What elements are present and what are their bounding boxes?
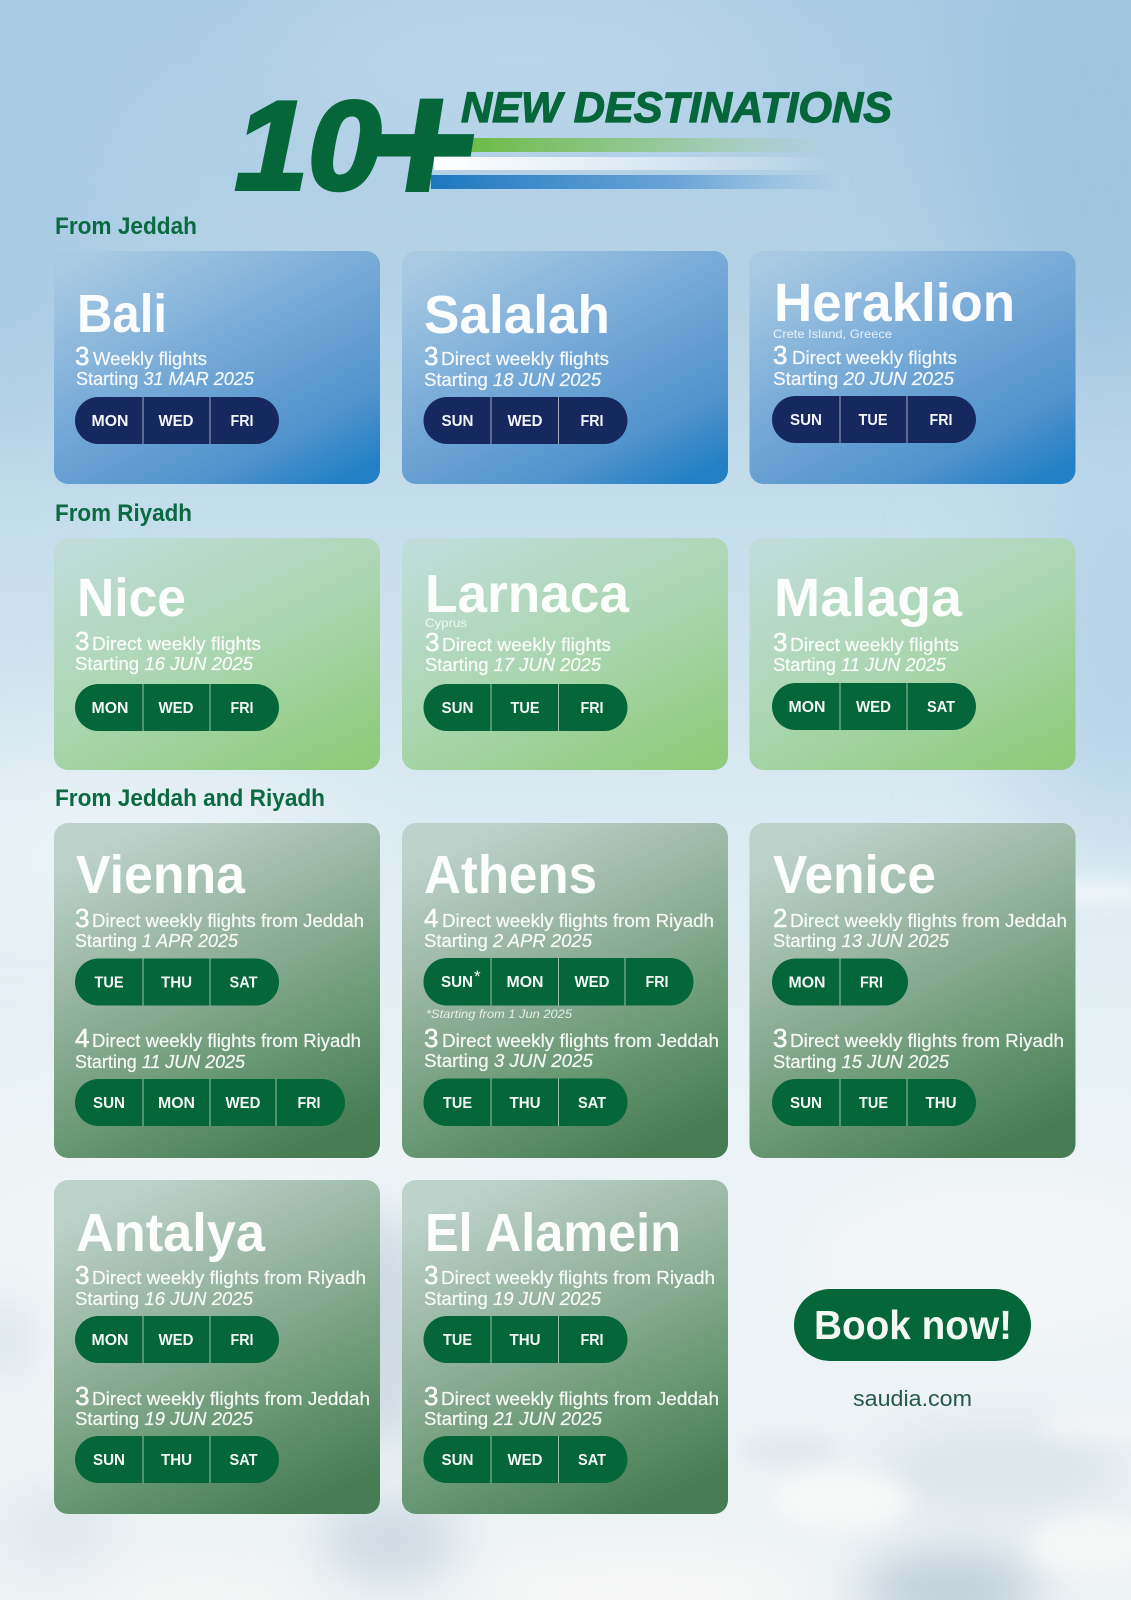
flight info from Riyadh: Direct weekly flights from Riyadh [92, 1030, 361, 1051]
flight info from Jeddah: Direct weekly flights from Jeddah [442, 1030, 719, 1051]
flight info: Direct weekly flights [792, 347, 957, 368]
flight days pill [772, 683, 976, 730]
panel: Nice [54, 538, 380, 770]
flight days pill: SUN [790, 1095, 822, 1112]
panel: Antalya [54, 1180, 380, 1514]
section heading: From Jeddah and Riyadh: From Jeddah and Riyadh [55, 785, 325, 812]
flight info from Riyadh: Direct weekly flights from Riyadh [442, 910, 714, 931]
panel: Malaga [750, 538, 1076, 770]
destination name: Vienna [76, 845, 246, 905]
flight days pill: FRI [298, 1095, 320, 1112]
flight days pill: FRI [580, 413, 604, 430]
flight info: Starting 17 JUN 2025 [425, 654, 602, 675]
flight days pill [75, 684, 279, 731]
flight days pill: TUE [94, 974, 124, 992]
flight info from Riyadh: Starting 19 JUN 2025 [424, 1288, 602, 1309]
flight info from Riyadh: 3 [75, 1260, 89, 1290]
panel: Larnaca [402, 538, 728, 770]
location: Crete Island, Greece [773, 327, 892, 341]
flight days pill: WED [508, 1452, 542, 1469]
panel: El Alamein [402, 1180, 728, 1514]
flight days pill: SAT [578, 1452, 606, 1469]
flight info from Jeddah: 3 [424, 1381, 438, 1411]
flight days pill: FRI [646, 974, 668, 991]
section heading: From Jeddah: From Jeddah [55, 213, 197, 240]
flight days pill: TUE [510, 700, 540, 717]
flight days pill: THU [510, 1332, 540, 1349]
flight info from Jeddah [75, 903, 364, 951]
location: Cyprus [425, 616, 467, 630]
flight info: Direct weekly flights [790, 634, 959, 655]
flight days pill: SUN [93, 1095, 125, 1112]
flight days pill: FRI [930, 412, 952, 429]
flight days pill [75, 1316, 279, 1363]
flight info [773, 627, 959, 675]
button: Book now [794, 1289, 1031, 1361]
flight info [773, 340, 957, 389]
flight days pill: WED [226, 1095, 260, 1112]
flight info from Riyadh: 4 [424, 903, 438, 933]
destination name: El Alamein [425, 1203, 681, 1263]
flight info: 3 [424, 341, 438, 371]
flight days pill [772, 1079, 976, 1126]
flight info from Riyadh: Starting 15 JUN 2025 [773, 1051, 950, 1072]
panel: Venice [750, 823, 1076, 1158]
flight info from Riyadh: Starting 11 JUN 2025 [75, 1051, 246, 1072]
flight days pill: SAT [230, 1452, 258, 1469]
flight info from Riyadh [773, 1023, 1064, 1072]
flight info from Riyadh: 3 [773, 1023, 787, 1053]
flight info: Starting 16 JUN 2025 [75, 653, 254, 674]
flight info from Jeddah: Direct weekly flights from Jeddah [92, 910, 364, 931]
flight days pill: SUN [442, 1452, 474, 1469]
flight days pill: FRI [230, 1332, 254, 1349]
flight info [425, 627, 611, 675]
flight info from Jeddah: Starting 19 JUN 2025 [75, 1408, 254, 1429]
flight days pill [75, 958, 279, 1006]
section heading: From Riyadh: From Riyadh [55, 500, 192, 527]
flight info from Riyadh [424, 1260, 715, 1309]
flight days pill: FRI [580, 1332, 604, 1349]
footnote: *Starting from 1 Jun 2025 [426, 1009, 573, 1021]
flight info: Starting 20 JUN 2025 [773, 368, 955, 389]
flight info from Riyadh: Starting 16 JUN 2025 [75, 1288, 254, 1309]
flight info from Riyadh: 4 [75, 1023, 89, 1053]
flight info from Riyadh: Starting 2 APR 2025 [424, 930, 593, 951]
flight days pill [772, 396, 976, 443]
destination name: Larnaca [425, 564, 630, 624]
flight info: 3 [75, 341, 89, 371]
flight days pill [424, 1078, 628, 1126]
flight info from Jeddah: 2 [773, 903, 787, 933]
speed stripes [431, 138, 841, 189]
title: 10+ new destinations [235, 44, 892, 242]
flight info from Jeddah: Starting 1 APR 2025 [75, 930, 239, 951]
panel: Vienna [54, 823, 380, 1158]
flight days pill: SAT [927, 699, 955, 716]
flight info: Weekly flights [93, 348, 207, 369]
flight info: 3 [425, 627, 439, 657]
flight days pill: MON [92, 413, 128, 430]
flight info from Riyadh: Direct weekly flights from Riyadh [790, 1030, 1064, 1051]
flight info from Jeddah [773, 903, 1067, 951]
flight days pill: MON [92, 700, 128, 717]
heading number: 10 [235, 75, 381, 216]
flight info: Direct weekly flights [92, 633, 261, 654]
destination name: Venice [773, 845, 936, 905]
flight days pill: SUN [442, 700, 474, 717]
flight info from Jeddah [424, 1023, 719, 1071]
flight info: Direct weekly flights [442, 634, 611, 655]
flight info: 3 [773, 627, 787, 657]
flight info from Riyadh: Direct weekly flights from Riyadh [92, 1267, 366, 1288]
flight info from Jeddah: Direct weekly flights from Jeddah [92, 1388, 370, 1409]
panel: Bali [54, 251, 380, 484]
flight days pill: WED [158, 413, 194, 430]
flight info from Riyadh: Direct weekly flights from Riyadh [441, 1267, 715, 1288]
flight info [424, 341, 609, 390]
flight info: Starting 31 MAR 2025 [76, 368, 255, 389]
flight days pill: THU [926, 1095, 956, 1112]
flight days pill: THU [161, 1452, 192, 1469]
panel: Heraklion [750, 251, 1076, 484]
flight days pill: MON [788, 699, 826, 716]
flight info from Jeddah: Starting 3 JUN 2025 [424, 1050, 594, 1071]
flight days pill: TUE [858, 412, 888, 429]
flight info [75, 626, 261, 674]
panel: Athens [402, 823, 728, 1158]
flight days pill: MON [158, 1095, 195, 1112]
flight info from Riyadh [75, 1023, 361, 1072]
flight days pill: FRI [860, 974, 883, 992]
flight days pill: WED [158, 700, 194, 717]
flight days pill: TUE [443, 1332, 472, 1349]
flight days pill [424, 958, 694, 1006]
flight days pill [424, 397, 628, 444]
flight info [75, 341, 255, 389]
flight info: Direct weekly flights [441, 348, 609, 369]
flight days pill [424, 684, 628, 731]
flight days pill [75, 397, 279, 444]
flight info: Starting 11 JUN 2025 [773, 654, 947, 675]
button: Book now: Book now! [814, 1302, 1012, 1348]
flight days pill: TUE [443, 1095, 472, 1112]
heading plus sign: + [355, 44, 494, 242]
destination name: Salalah [424, 285, 610, 345]
flight days pill [75, 1079, 345, 1126]
flight days pill: FRI [230, 413, 254, 430]
destination name: Athens [424, 845, 597, 905]
panel: Salalah [402, 251, 728, 484]
flight days pill [772, 958, 908, 1006]
flight days pill: MON [506, 974, 544, 991]
flight days pill: * [474, 967, 481, 986]
flight days pill: SUN [93, 1452, 125, 1469]
destination name: Bali [77, 284, 167, 344]
flight days pill: MON [788, 974, 826, 992]
flight days pill: WED [508, 413, 542, 430]
flight days pill: SUN [441, 974, 473, 991]
flight info from Jeddah: 3 [424, 1023, 438, 1053]
flight days pill: TUE [859, 1095, 888, 1112]
flight info from Jeddah: 3 [75, 903, 89, 933]
flight info from Riyadh: 3 [424, 1260, 438, 1290]
flight days pill: FRI [230, 700, 254, 717]
flight info: 3 [773, 340, 787, 370]
flight days pill: WED [158, 1332, 194, 1349]
destination name: Heraklion [774, 273, 1015, 333]
flight days pill: SUN [790, 412, 822, 429]
flight days pill: MON [92, 1332, 128, 1349]
flight info from Riyadh [424, 903, 714, 951]
website link: saudia.com [853, 1386, 972, 1411]
flight days pill: THU [161, 974, 192, 992]
flight days pill [75, 1436, 279, 1483]
flight info from Jeddah: Direct weekly flights from Jeddah [790, 910, 1067, 931]
flight days pill: SUN [442, 413, 474, 430]
flight info from Jeddah [75, 1381, 370, 1429]
flight info from Jeddah [424, 1381, 719, 1429]
destination name: Nice [77, 568, 186, 628]
flight info: 3 [75, 626, 89, 656]
flight info from Jeddah: Starting 13 JUN 2025 [773, 930, 950, 951]
destination name: Antalya [76, 1203, 266, 1263]
flight days pill: SAT [230, 974, 258, 992]
flight days pill [424, 1436, 628, 1483]
flight info from Riyadh [75, 1260, 366, 1309]
flight info from Jeddah: Starting 21 JUN 2025 [424, 1408, 603, 1429]
flight days pill: WED [856, 699, 891, 716]
flight info from Jeddah: Direct weekly flights from Jeddah [441, 1388, 719, 1409]
heading text: NEW DESTINATIONS [461, 84, 892, 132]
flight days pill: WED [574, 974, 610, 991]
flight info: Starting 18 JUN 2025 [424, 369, 602, 390]
flight days pill: THU [510, 1095, 540, 1112]
flight days pill [424, 1316, 628, 1363]
flight days pill: SAT [578, 1095, 606, 1112]
destination name: Malaga [774, 568, 963, 628]
flight info from Jeddah: 3 [75, 1381, 89, 1411]
flight days pill: FRI [580, 700, 604, 717]
